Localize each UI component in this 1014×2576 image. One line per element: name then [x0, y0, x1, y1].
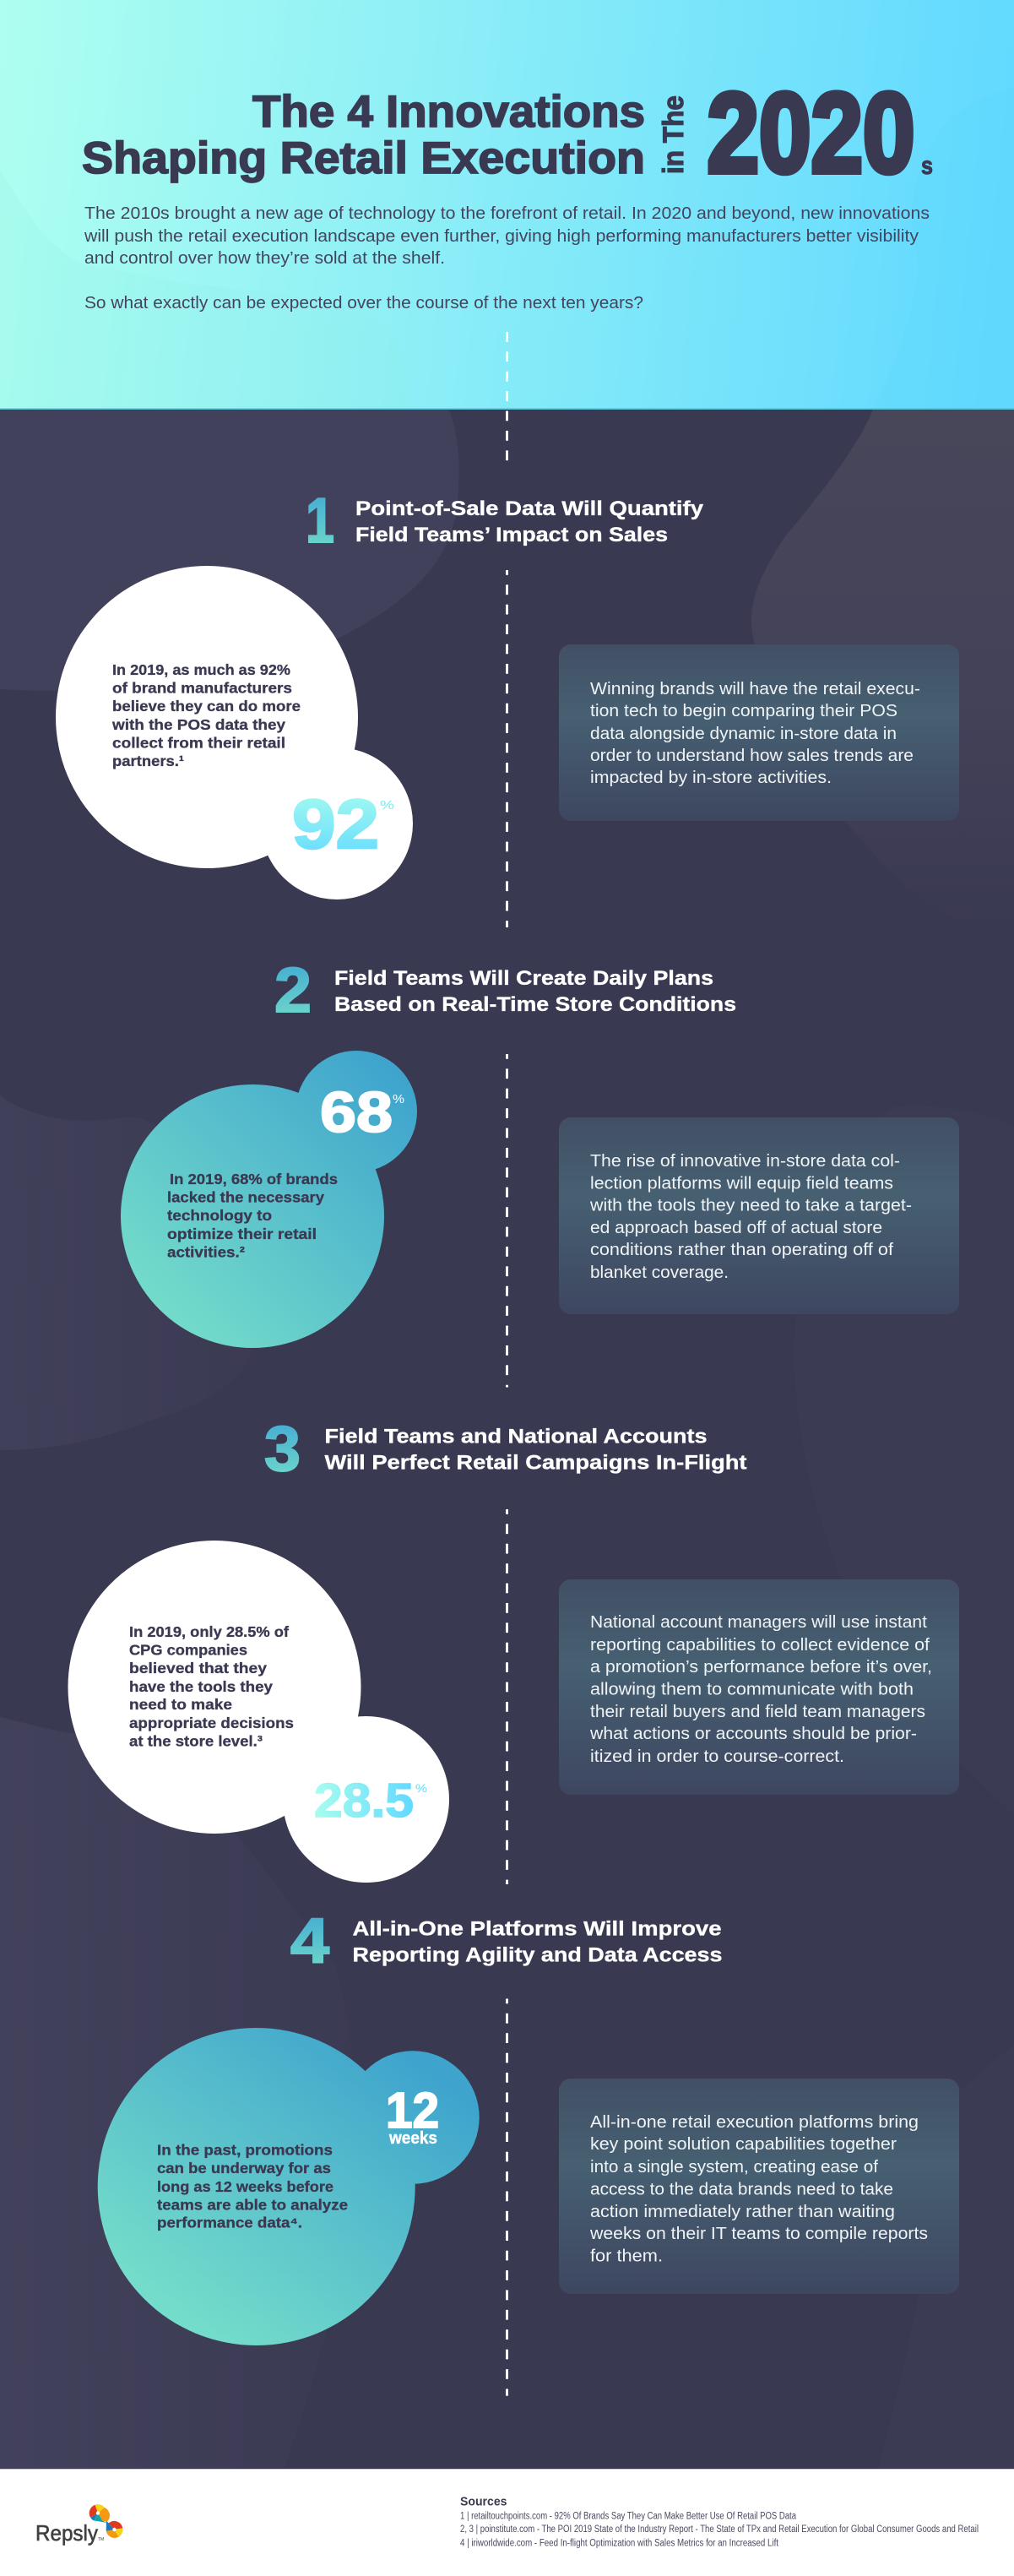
- section 4 text panel: [559, 2079, 959, 2294]
- footer: [0, 2469, 1014, 2576]
- section 2 text panel: conditions rather than operating off of: [590, 1240, 893, 1259]
- section 3 heading: 3: [264, 1413, 301, 1484]
- section 3 text panel: allowing them to communicate with both: [590, 1679, 914, 1699]
- section 1 text panel: [559, 644, 959, 821]
- section 1 stat bubble: %: [380, 798, 394, 812]
- section 4 heading: All-in-One Platforms Will Improve: [353, 1917, 721, 1941]
- section 1 text panel: Winning brands will have the retail execu-: [590, 679, 920, 698]
- section 3 stat bubble: CPG companies: [129, 1642, 247, 1659]
- section 1 stat bubble: collect from their retail: [112, 735, 285, 752]
- title: 2020: [708, 71, 915, 196]
- section 1 text panel: tion tech to begin comparing their POS: [590, 701, 897, 720]
- section 2 heading: Field Teams Will Create Daily Plans: [334, 967, 713, 990]
- section 3 text panel: their retail buyers and field team managers: [590, 1702, 925, 1721]
- section 1 stat bubble: of brand manufacturers: [112, 679, 292, 696]
- title: in The: [658, 95, 690, 174]
- section 3 text panel: what actions or accounts should be prior-: [589, 1724, 917, 1743]
- section 4 heading: [290, 1905, 723, 1976]
- section 3 dashed connector: [506, 1509, 508, 1884]
- sources: 1 | retailtouchpoints.com - 92% Of Brands Say They Can Make Better Use Of Retail POS Data: [460, 2512, 796, 2522]
- section 4 dashed connector: [506, 1998, 508, 2396]
- section 2 heading: 2: [274, 954, 312, 1025]
- section 2 heading: [274, 954, 736, 1025]
- section 1 stat bubble: with the POS data they: [111, 716, 285, 733]
- logo: Repsly: [35, 2504, 122, 2546]
- logo: Repsly: TM: [98, 2537, 104, 2542]
- section 1 dashed connector: [506, 570, 508, 927]
- section 4 stat bubble: teams are able to analyze: [157, 2196, 348, 2213]
- section 2 text panel: blanket coverage.: [590, 1263, 729, 1282]
- section 2 stat bubble: lacked the necessary: [167, 1189, 324, 1206]
- section 2 heading: Based on Real-Time Store Conditions: [334, 993, 736, 1016]
- section 3 stat bubble: believed that they: [129, 1660, 267, 1677]
- section 3 heading: Will Perfect Retail Campaigns In-Flight: [324, 1451, 747, 1475]
- section 1 heading: Point-of-Sale Data Will Quantify: [355, 497, 704, 520]
- section 3 stat bubble: have the tools they: [129, 1678, 273, 1695]
- section 4 text panel: All-in-one retail execution platforms bring: [590, 2112, 919, 2132]
- section 3 stat bubble: [68, 1541, 449, 1883]
- section 1 heading: Field Teams’ Impact on Sales: [355, 524, 668, 546]
- section 3 stat bubble: appropriate decisions: [129, 1715, 294, 1731]
- section 4 stat bubble: 12: [386, 2083, 439, 2139]
- section 4 stat bubble: performance data⁴.: [157, 2215, 302, 2231]
- intro text: and control over how they’re sold at the shelf.: [84, 248, 445, 268]
- section 2 stat bubble: activities.²: [167, 1243, 245, 1260]
- dark background: [0, 410, 1014, 2469]
- section 4 text panel: weeks on their IT teams to compile reports: [589, 2224, 928, 2243]
- section 2 text panel: The rise of innovative in-store data col-: [590, 1151, 900, 1171]
- section 4 text panel: into a single system, creating ease of: [590, 2157, 878, 2177]
- section 4 text panel: action immediately rather than waiting: [590, 2202, 895, 2221]
- section 4 text panel: for them.: [590, 2247, 663, 2265]
- section 2 stat bubble: %: [393, 1092, 404, 1106]
- section 4 stat bubble: can be underway for as: [157, 2160, 331, 2177]
- section 3 text panel: [559, 1579, 959, 1795]
- sources: Sources: [460, 2495, 507, 2508]
- intro text: So what exactly can be expected over the course of the next ten years?: [84, 293, 643, 312]
- section 3 heading: [264, 1413, 747, 1484]
- dashed connector: [506, 332, 508, 462]
- section 3 stat bubble: at the store level.³: [129, 1733, 263, 1750]
- sources: 4 | iriworldwide.com - Feed In-flight Optimization with Sales Metrics for an Increased Lift: [460, 2539, 779, 2549]
- section 3 heading: Field Teams and National Accounts: [324, 1426, 708, 1448]
- section 2 stat bubble: 68: [320, 1080, 393, 1144]
- section 1 stat bubble: 92: [292, 785, 379, 863]
- sources: [460, 2495, 979, 2549]
- section 1 stat bubble: partners.¹: [112, 753, 184, 769]
- section 4 text panel: access to the data brands need to take: [590, 2179, 893, 2199]
- logo: Repsly: Repsly: [35, 2520, 98, 2546]
- section 3 stat bubble: 28.5: [314, 1774, 414, 1828]
- section 1 stat bubble: [56, 566, 413, 899]
- section 1 stat bubble: believe they can do more: [112, 698, 301, 715]
- section 2 text panel: lection platforms will equip field teams: [590, 1174, 893, 1193]
- title: s: [921, 152, 933, 180]
- title: The 4 Innovations: [252, 87, 645, 137]
- section 3 text panel: a promotion’s performance before it’s over,: [590, 1657, 932, 1677]
- section 3 stat bubble: In 2019, only 28.5% of: [129, 1623, 289, 1640]
- section 3 stat bubble: need to make: [129, 1696, 232, 1713]
- section 1 text panel: order to understand how sales trends are: [590, 746, 914, 765]
- section 2 text panel: [559, 1117, 959, 1314]
- section 4 stat bubble: In the past, promotions: [157, 2142, 333, 2159]
- section 2 stat bubble: technology to: [167, 1207, 272, 1224]
- section 1 text panel: impacted by in-store activities.: [590, 768, 832, 787]
- section 4 stat bubble: long as 12 weeks before: [157, 2178, 333, 2195]
- section 2 dashed connector: [506, 1054, 508, 1387]
- header background: [0, 0, 1014, 410]
- section 1 text panel: data alongside dynamic in-store data in: [590, 724, 897, 743]
- section 3 text panel: reporting capabilities to collect evidence of: [590, 1635, 930, 1655]
- intro text: The 2010s brought a new age of technology to the forefront of retail. In 2020 and beyond, new innovations: [84, 204, 930, 223]
- section 4 stat bubble: [98, 2028, 480, 2345]
- title: Shaping Retail Execution: [82, 133, 645, 183]
- section 3 text panel: itized in order to course-correct.: [590, 1747, 844, 1766]
- section 1 heading: 1: [306, 485, 334, 556]
- title: [82, 71, 933, 196]
- section 3 stat bubble: %: [415, 1781, 427, 1795]
- section 4 heading: 4: [290, 1905, 329, 1976]
- section 2 stat bubble: [121, 1051, 417, 1348]
- section 4 stat bubble: weeks: [388, 2129, 437, 2148]
- section 2 text panel: with the tools they need to take a target-: [589, 1196, 912, 1215]
- section 1 heading: [306, 485, 704, 556]
- section 2 stat bubble: optimize their retail: [167, 1226, 317, 1242]
- section 2 text panel: ed approach based off of actual store: [590, 1218, 882, 1237]
- section 1 stat bubble: In 2019, as much as 92%: [112, 661, 290, 678]
- section 2 stat bubble: In 2019, 68% of brands: [170, 1171, 338, 1187]
- intro text: will push the retail execution landscape even further, giving high performing manufacturers better visibility: [84, 226, 919, 246]
- section 4 heading: Reporting Agility and Data Access: [353, 1944, 723, 1966]
- section 3 text panel: National account managers will use instant: [590, 1612, 927, 1632]
- intro text: [84, 204, 930, 312]
- section 4 text panel: key point solution capabilities together: [590, 2134, 897, 2154]
